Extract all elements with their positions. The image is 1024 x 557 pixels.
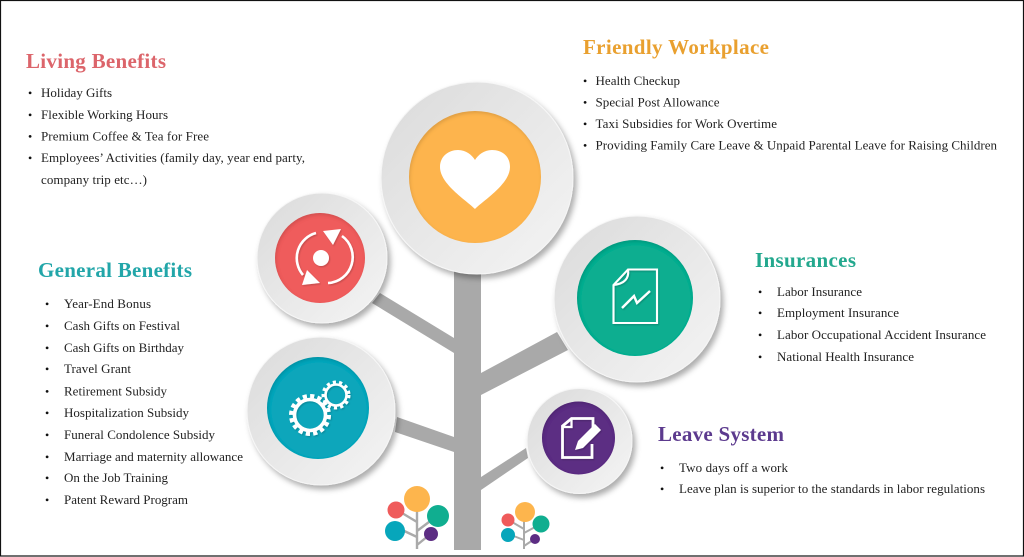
list: general benefits: Travel Grant [64,361,131,376]
list: general benefits: • [45,319,49,333]
list: friendly workplace: • [583,138,587,152]
branch to green circle [481,332,568,395]
list: living benefits: Flexible Working Hours [41,107,168,122]
list: general benefits: • [45,471,49,485]
branch to teal circle [395,417,454,452]
teal disc [267,357,369,459]
red disc [275,213,365,303]
list: general benefits: Funeral Condolence Subsidy [64,427,216,442]
outer ring [257,193,387,323]
list: general benefits: Hospitalization Subsidy [64,405,190,420]
green disc [577,240,693,356]
heading: living benefits: Living Benefits [26,49,166,73]
heading: insurances: Insurances [755,248,856,272]
list: living benefits: company trip etc…) [41,172,147,187]
list: general benefits: On the Job Training [64,470,168,485]
list: general benefits: • [45,493,49,507]
list: general benefits: Cash Gifts on Festival [64,318,180,333]
list: friendly workplace: Special Post Allowance [596,95,720,110]
list: general benefits: • [45,428,49,442]
list: insurances: • [758,328,762,342]
list: friendly workplace: Taxi Subsidies for Work Overtime [596,116,777,131]
panel: general benefits [38,258,243,507]
list: general benefits: • [45,297,49,311]
list: general benefits: • [45,406,49,420]
small tree: right [501,502,550,549]
icon: chart document [614,270,657,323]
list: living benefits [28,85,305,187]
list: living benefits: • [28,151,32,165]
list: general benefits: Cash Gifts on Birthday [64,340,184,355]
list: friendly workplace: Health Checkup [596,73,680,88]
list: general benefits: • [45,450,49,464]
node: general benefits gears [247,337,395,485]
icon: rotating arrows [297,229,353,285]
tree trunk and branches [372,255,568,550]
node: living benefits refresh [257,193,387,323]
list: general benefits: • [45,384,49,398]
heading: general benefits: General Benefits [38,258,192,282]
node: insurances document [554,216,720,382]
list: friendly workplace [583,73,998,152]
list: friendly workplace: • [583,96,587,110]
list: leave system: • [660,461,664,475]
list: general benefits: Retirement Subsidy [64,384,168,398]
list: general benefits: Patent Reward Program [64,492,188,507]
list: insurances: National Health Insurance [777,349,914,364]
list: insurances [758,284,986,364]
list: general benefits [45,296,243,507]
purple disc [542,402,615,474]
list: living benefits: • [28,108,32,122]
list: leave system [660,460,985,496]
list: friendly workplace: • [583,117,587,131]
outer ring [554,216,720,382]
orange disc [409,111,541,243]
outer ring [381,82,573,274]
list: living benefits: Employees’ Activities (family day, year end party, [41,150,305,165]
heading: leave system: Leave System [658,422,784,446]
panel: leave system [658,422,985,496]
list: living benefits: Premium Coffee & Tea for Free [41,128,209,144]
list: general benefits: Year-End Bonus [64,296,151,311]
panel: friendly workplace [583,35,998,152]
list: leave system: Two days off a work [679,460,788,475]
panel: living benefits [26,49,305,187]
list: friendly workplace: • [583,74,587,88]
branch to red circle [372,293,454,353]
list: insurances: • [758,285,762,299]
list: insurances: Labor Insurance [777,284,862,299]
icon: heart [440,150,510,209]
list: insurances: Labor Occupational Accident Insurance [777,327,986,342]
list: general benefits: Marriage and maternity allowance [64,449,243,464]
small tree: left [385,486,449,549]
list: leave system: Leave plan is superior to the standards in labor regulations [679,481,985,496]
heading: friendly workplace: Friendly Workplace [583,35,769,59]
outer ring [527,388,632,494]
list: insurances: • [758,306,762,320]
trunk [454,255,481,550]
list: living benefits: • [28,130,32,144]
panel: insurances [755,248,986,364]
icon: document with pencil [562,418,601,458]
list: friendly workplace: Providing Family Care Leave & Unpaid Parental Leave for Raising Children [596,138,998,152]
branch to purple circle [481,448,528,490]
icon: gears [291,382,349,434]
list: leave system: • [660,482,664,496]
node: leave system edit [527,388,632,494]
list: insurances: • [758,350,762,364]
list: general benefits: • [45,362,49,376]
list: general benefits: • [45,341,49,355]
node: friendly workplace heart [381,82,573,274]
list: living benefits: • [28,86,32,100]
outer ring [247,337,395,485]
list: living benefits: Holiday Gifts [41,85,112,100]
list: insurances: Employment Insurance [777,305,899,320]
